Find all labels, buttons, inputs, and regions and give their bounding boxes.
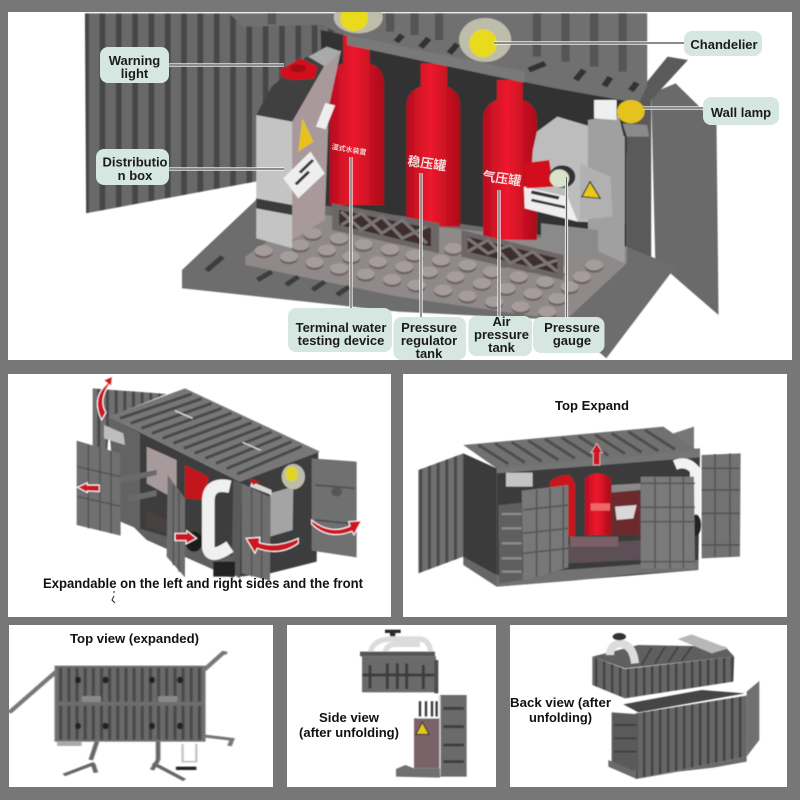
- arrow: right door curve: [246, 537, 298, 553]
- label: pressure gauge: Pressure: [544, 320, 600, 335]
- warning triangle: [416, 722, 429, 734]
- left door: [418, 453, 463, 573]
- front frame top: [497, 448, 700, 473]
- caption: back view: unfolding): [529, 710, 592, 725]
- handles: [82, 696, 101, 702]
- label: warning light: light: [121, 66, 149, 81]
- right door arm: [204, 653, 227, 670]
- top margin strip: [0, 0, 800, 12]
- caption: side view: (after unfolding): [299, 725, 399, 740]
- icon: wall lamp: [617, 100, 649, 137]
- end flap: [747, 681, 759, 757]
- roof: [108, 388, 320, 482]
- arrow: up: [591, 443, 603, 465]
- container with side doors: [77, 376, 362, 581]
- wheel: [691, 514, 701, 536]
- container interior illustration: [85, 1, 719, 358]
- side door: [612, 712, 638, 772]
- floor side: [133, 527, 233, 578]
- top view drawing: [9, 653, 232, 780]
- upper box top: [592, 645, 734, 668]
- centre rail: [56, 702, 204, 706]
- spare panel: [678, 634, 728, 653]
- caption: back view: Back view (after: [510, 695, 611, 710]
- dark vent: [417, 700, 439, 718]
- pipe base: [176, 767, 196, 770]
- leader lines: [169, 43, 703, 317]
- lower roof: [623, 690, 745, 712]
- small stray mark: [112, 592, 115, 603]
- label: pressure regulator tank: Pressure: [401, 320, 457, 335]
- knob: [385, 630, 401, 636]
- label: pressure regulator tank: [394, 317, 466, 361]
- connectors: [120, 470, 157, 483]
- left door arm: [9, 672, 56, 713]
- hinged door left: [64, 742, 97, 775]
- bottom piece: [57, 741, 82, 746]
- tank 3: [483, 80, 537, 240]
- caption: expandable: Expandable on the left and right sides and the front: [43, 576, 363, 591]
- distribution box: [256, 47, 341, 248]
- open left door and back wall: [85, 13, 647, 213]
- label: warning light: [100, 47, 169, 83]
- floor studs: [255, 228, 603, 319]
- panel: top view: [9, 625, 273, 787]
- label: air pressure tank: [468, 314, 532, 356]
- icon: tank rear: [550, 475, 575, 537]
- panel: side view: [287, 625, 496, 787]
- heading: top expand: Top Expand: [555, 399, 629, 413]
- tank 2: [406, 63, 460, 227]
- floor: [568, 540, 642, 563]
- caption: back view: [510, 695, 611, 725]
- label: pressure gauge: gauge: [553, 333, 591, 348]
- label: chandelier: Chandelier: [690, 37, 758, 52]
- studs: [75, 677, 183, 729]
- upper box: [362, 656, 436, 692]
- label: pressure regulator tank: regulator: [401, 333, 457, 348]
- container top expand: [418, 427, 741, 587]
- right inner door: [641, 477, 695, 568]
- label: wall lamp: [703, 97, 779, 125]
- back view drawing: [592, 633, 759, 779]
- icon: chandelier left: [334, 1, 383, 33]
- floor slats: [206, 257, 349, 295]
- panel: back view: [510, 625, 787, 787]
- left end interior: [463, 453, 497, 587]
- label: terminal water testing device: [288, 308, 392, 352]
- label: air pressure tank: Air: [492, 314, 511, 329]
- panel: interior diagram: [8, 12, 792, 360]
- rear roof tip: [673, 427, 694, 450]
- floor base: [182, 197, 676, 358]
- tank 1: [330, 33, 384, 205]
- studs row: [360, 652, 435, 656]
- icon: chandelier centre: [459, 18, 511, 62]
- pipe: [610, 643, 635, 663]
- ceiling: [229, 13, 647, 103]
- label: air pressure tank: tank: [488, 340, 516, 355]
- stud plate: [245, 213, 627, 317]
- left inner door: [522, 485, 568, 581]
- arrow: left door: [77, 483, 99, 493]
- body interior: [108, 417, 318, 577]
- label: pressure gauge: [533, 317, 604, 353]
- hinged door right: [152, 742, 185, 780]
- arrow: far right curve: [312, 520, 362, 535]
- frame: [56, 667, 204, 741]
- caption: side view: [299, 710, 399, 740]
- icon: tank front: [585, 473, 611, 535]
- panel: top expand: [403, 374, 787, 617]
- label: terminal water testing device: testing device: [298, 333, 384, 348]
- panel: expandable sides: [8, 374, 391, 617]
- pressure gauge box: [523, 100, 625, 263]
- far left door: [77, 441, 121, 536]
- right door: [651, 83, 719, 315]
- centre-left door: [167, 475, 185, 577]
- right lower arm: [204, 736, 232, 746]
- lower wall: [636, 696, 747, 779]
- icon: white pipe: [185, 486, 235, 577]
- label: distribution box: [96, 149, 169, 185]
- interior parts: [147, 447, 177, 500]
- heading: top view: Top view (expanded): [70, 631, 199, 646]
- ladder door: [498, 503, 523, 583]
- label: chandelier: [684, 31, 762, 56]
- tank text: regulator: 稳压罐: [407, 153, 447, 174]
- right door frame: [627, 57, 688, 263]
- label: distribution box: Distributio: [102, 154, 168, 170]
- fence right: [461, 230, 563, 280]
- knob: [613, 633, 626, 640]
- side view drawing: [360, 630, 467, 778]
- ceiling beam: [347, 35, 525, 83]
- interior: [497, 450, 700, 587]
- label: terminal water testing device: Terminal water: [296, 320, 386, 335]
- icon: warning light: [280, 58, 317, 80]
- lower door: [439, 695, 467, 777]
- grill: [506, 473, 533, 487]
- base: [396, 765, 440, 778]
- caption: side view: Side view: [319, 710, 380, 725]
- side strip: [434, 660, 438, 693]
- bottom rail: [608, 757, 747, 779]
- roof: [463, 427, 697, 468]
- icon: white pipe: [675, 463, 695, 530]
- centre-right door: [242, 483, 271, 581]
- back wall shadow: [321, 30, 627, 247]
- ceiling slats: [396, 35, 637, 91]
- roof slats: [120, 394, 302, 474]
- white pipe: [183, 744, 196, 762]
- grill: [104, 425, 125, 445]
- label: warning light: Warning: [109, 53, 160, 68]
- arrow: up left: [97, 376, 113, 420]
- base rectangle: [56, 667, 204, 741]
- tank text: [591, 503, 610, 511]
- label: distribution box: n box: [118, 168, 153, 183]
- left side frame: [108, 417, 140, 530]
- tank text: air pressure: 气压罐: [482, 168, 522, 189]
- far right door: [312, 458, 357, 557]
- upper box wall: [592, 657, 734, 698]
- label: wall lamp: Wall lamp: [711, 105, 771, 120]
- back wall: [93, 388, 167, 457]
- far right door: [702, 453, 741, 558]
- label: air pressure tank: pressure: [474, 327, 529, 342]
- fence left: [332, 203, 439, 253]
- arrow: centre door: [175, 531, 197, 544]
- label: pressure regulator tank: tank: [416, 346, 443, 361]
- inner unit: [612, 483, 641, 493]
- tank text: water device: 湿式水装置: [331, 142, 367, 157]
- pipe: [371, 639, 431, 653]
- fence: [570, 537, 618, 547]
- lower inner: [414, 718, 439, 768]
